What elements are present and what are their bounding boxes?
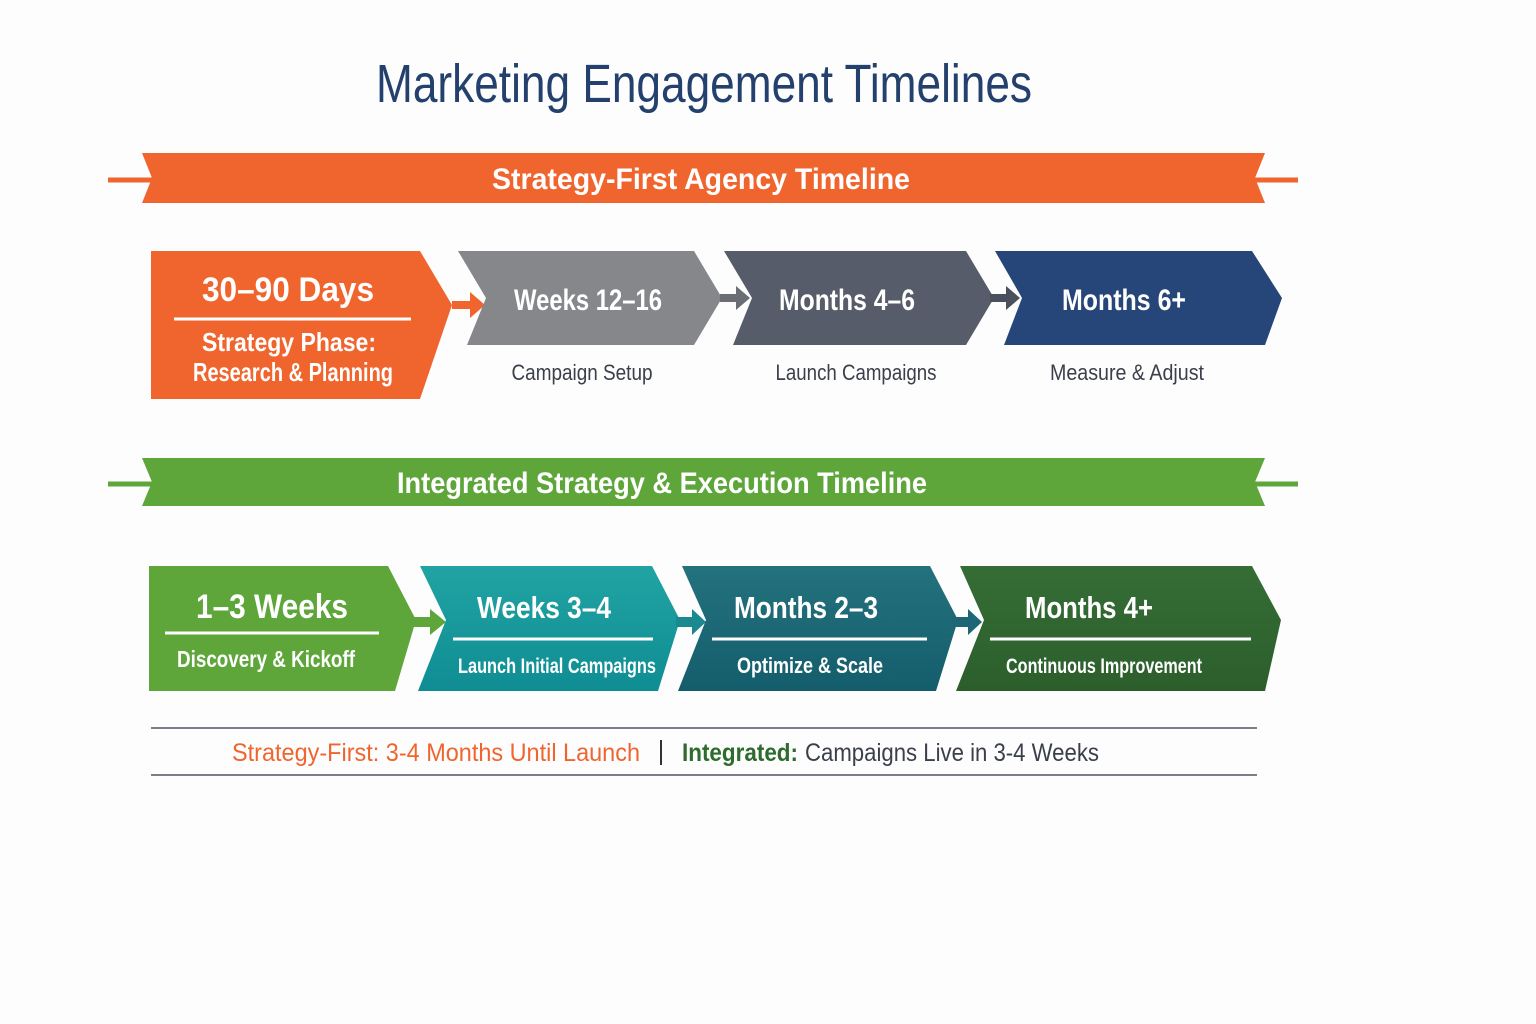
arrow <box>952 609 982 635</box>
banner: integrated: Integrated Strategy & Execution Timeline <box>397 467 927 500</box>
arrow <box>452 292 485 318</box>
step: 1-3 weeks: 1–3 Weeks <box>196 588 348 626</box>
banner: integrated <box>108 458 1298 506</box>
step: months 6+: Months 6+ <box>1062 284 1186 317</box>
arrow <box>990 286 1020 310</box>
step: weeks 12-16: Weeks 12–16 <box>514 284 662 317</box>
step: 30-90 days: Research & Planning <box>193 357 393 387</box>
step: weeks 12-16 <box>458 251 722 385</box>
step: 1-3 weeks <box>149 566 416 691</box>
step: 30-90 days <box>151 251 452 399</box>
step: 30-90 days: 30–90 Days <box>202 271 374 309</box>
banner: strategy-first: Strategy-First Agency Timeline <box>492 163 910 196</box>
step: weeks 3-4 <box>418 566 680 691</box>
step: months 4-6 <box>724 251 994 385</box>
summary bar: Strategy-First: 3-4 Months Until Launch <box>232 739 640 767</box>
step: months 4+ <box>956 566 1281 691</box>
banner: strategy-first <box>108 153 1298 203</box>
step: months 6+: Measure & Adjust <box>1050 360 1204 385</box>
arrow <box>412 609 446 635</box>
summary bar: Integrated: <box>682 739 798 767</box>
step: weeks 3-4: Launch Initial Campaigns <box>458 655 656 678</box>
step: weeks 12-16: Campaign Setup <box>512 360 652 385</box>
summary bar <box>151 728 1257 775</box>
arrow <box>720 286 750 310</box>
arrow <box>676 609 706 635</box>
step: months 2-3: Months 2–3 <box>734 590 878 625</box>
step: months 4+: Months 4+ <box>1025 590 1153 625</box>
step: months 6+ <box>995 251 1282 385</box>
summary bar: Campaigns Live in 3-4 Weeks <box>805 739 1099 767</box>
step: months 4-6: Months 4–6 <box>779 284 915 317</box>
step: months 4+: Continuous Improvement <box>1006 655 1202 678</box>
title: Marketing Engagement Timelines <box>376 54 1032 114</box>
step: months 2-3: Optimize & Scale <box>737 653 883 678</box>
step: 1-3 weeks: Discovery & Kickoff <box>177 646 355 672</box>
step: months 2-3 <box>678 566 958 691</box>
step: weeks 3-4: Weeks 3–4 <box>477 590 612 625</box>
step: months 4-6: Launch Campaigns <box>776 360 936 385</box>
step: 30-90 days: Strategy Phase: <box>202 327 376 357</box>
